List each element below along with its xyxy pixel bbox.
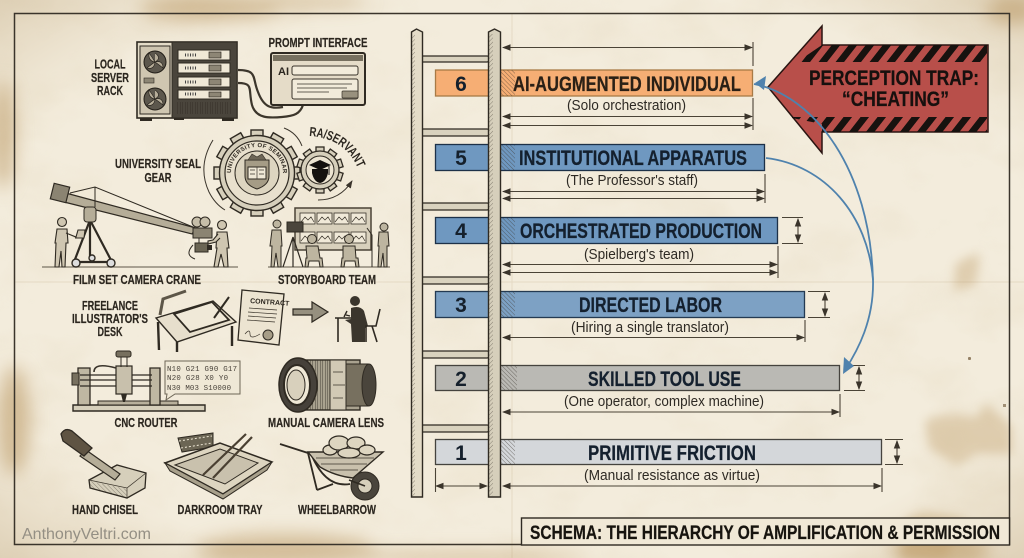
bar 4: orchestrated production: ORCHESTRATED PRODUCTION — [520, 220, 762, 243]
label: university seal gear — [115, 156, 201, 185]
person: camera operator right — [208, 220, 229, 267]
bar 2: skilled tool use: 2 — [455, 368, 467, 391]
callout: g-code box: N30 M03 S10000 — [167, 385, 231, 393]
ladder — [412, 29, 500, 497]
illustration: illustrator's desk with tablet — [156, 291, 236, 352]
bar 4: orchestrated production — [436, 218, 778, 263]
illustration: darkroom tray — [165, 433, 272, 499]
bar 4: orchestrated production: 4 — [455, 220, 467, 243]
label: university seal gear: GEAR — [144, 170, 172, 185]
label: freelance illustrator's desk: DESK — [98, 324, 123, 339]
label: film set camera crane: FILM SET CAMERA CRANE — [73, 272, 201, 287]
panel: ladder bars — [436, 70, 882, 484]
callout: g-code box: N10 G21 G90 G17 — [167, 366, 237, 374]
label: wheelbarrow: WHEELBARROW — [298, 502, 377, 517]
dimension lines — [436, 42, 903, 492]
bar 1: primitive friction: 1 — [455, 442, 467, 465]
arrow: blue curves between rungs — [754, 76, 873, 374]
label: local server rack: SERVER — [91, 70, 129, 85]
illustration: prompt interface window — [271, 53, 365, 105]
label: local server rack — [91, 56, 129, 98]
label: freelance illustrator's desk — [72, 298, 148, 339]
callout: g-code box — [165, 361, 240, 400]
bar 2: skilled tool use: (One operator, complex machine) — [564, 393, 764, 410]
gear rotation arrows — [204, 128, 352, 210]
bar 3: directed labor: (Hiring a single translator) — [571, 319, 729, 336]
bar 1: primitive friction — [436, 440, 882, 484]
label: prompt interface: PROMPT INTERFACE — [268, 35, 368, 50]
person: crane operator left — [55, 218, 85, 267]
icon: arrow to translator — [293, 302, 328, 322]
callout: perception trap arrow: PERCEPTION TRAP: — [809, 67, 979, 90]
label: RA/SERVANT: RA/SERVANT — [310, 127, 366, 166]
bar 1: primitive friction: (Manual resistance as virtue) — [584, 467, 760, 484]
bar 5: institutional apparatus: INSTITUTIONAL APPARATUS — [519, 147, 747, 170]
callout: perception trap arrow: “CHEATING” — [842, 88, 949, 111]
label: local server rack: LOCAL — [94, 56, 126, 72]
illustration: film set camera crane — [42, 183, 238, 267]
illustration: manual camera lens — [279, 358, 376, 412]
bar 5: institutional apparatus — [436, 144, 764, 189]
illustration: prompt interface window: AI — [278, 66, 289, 78]
bar 5: institutional apparatus: 5 — [455, 147, 467, 170]
bar 3: directed labor — [436, 292, 804, 336]
illustration: storyboard team — [268, 208, 390, 267]
bar 3: directed labor: 3 — [455, 294, 467, 317]
watermark: AnthonyVeltri.com — [22, 526, 151, 543]
illustration: university seal gear — [213, 129, 300, 217]
bar 6: AI-augmented individual: (Solo orchestration) — [567, 97, 686, 114]
bar 6: AI-augmented individual: 6 — [455, 73, 467, 96]
illustration: hand chisel — [61, 430, 146, 498]
bar 5: institutional apparatus: (The Professor's staff) — [566, 172, 698, 189]
label: hand chisel: HAND CHISEL — [72, 502, 138, 517]
bar 6: AI-augmented individual: AI-AUGMENTED INDIVIDUAL — [513, 73, 741, 96]
label: storyboard team: STORYBOARD TEAM — [278, 272, 376, 287]
label: darkroom tray: DARKROOM TRAY — [178, 502, 263, 517]
illustration: RA/servant gear — [297, 147, 343, 193]
callout: perception trap arrow — [768, 26, 988, 153]
label: freelance illustrator's desk: ILLUSTRATOR'S — [72, 311, 148, 326]
illustration: local server rack — [137, 42, 237, 121]
label: local server rack: RACK — [97, 83, 123, 98]
bar 6: AI-augmented individual — [436, 70, 752, 114]
illustration: contract document: CONTRACT — [250, 298, 290, 308]
label: university seal gear: UNIVERSITY SEAL — [115, 156, 201, 171]
bar 1: primitive friction: PRIMITIVE FRICTION — [588, 442, 756, 465]
illustration: CNC router — [72, 351, 205, 411]
label: freelance illustrator's desk: FREELANCE — [82, 298, 138, 313]
callout: g-code box: N20 G28 X0 Y0 — [167, 375, 228, 383]
bar 2: skilled tool use — [436, 366, 840, 410]
label: CNC router: CNC ROUTER — [114, 415, 178, 430]
bar 3: directed labor: DIRECTED LABOR — [579, 294, 722, 317]
illustration: contract document — [238, 290, 290, 345]
bar 2: skilled tool use: SKILLED TOOL USE — [588, 368, 741, 391]
illustration: cables — [238, 70, 303, 118]
bar 4: orchestrated production: (Spielberg's team) — [584, 246, 694, 263]
label: manual camera lens: MANUAL CAMERA LENS — [268, 415, 384, 430]
illustration: person writing at desk — [335, 296, 380, 342]
illustration: wheelbarrow — [280, 436, 383, 500]
